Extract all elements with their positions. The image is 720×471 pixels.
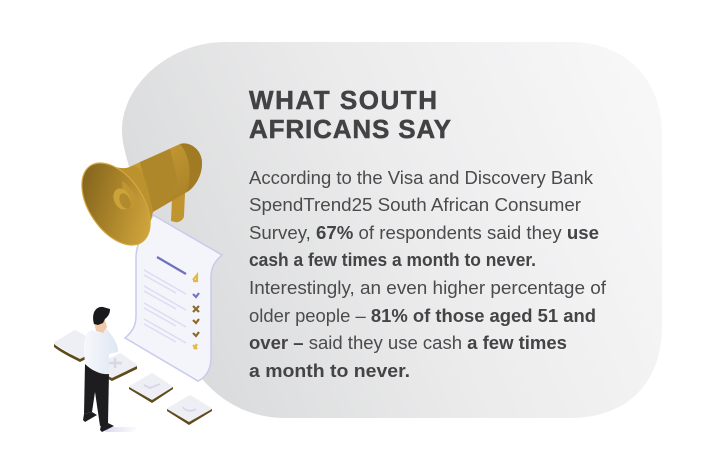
- icon: survey paper: [125, 215, 222, 381]
- icon: tile cross: [97, 354, 137, 381]
- icon: megaphone: [68, 143, 202, 257]
- body text: SpendTrend25 South African Consumer: [249, 194, 581, 215]
- body text: Interestingly, an even higher percentage of: [249, 277, 607, 298]
- body text: a month to never.: [249, 360, 410, 381]
- body text: over – said they use cash a few times: [249, 332, 567, 353]
- panel: speech background: [122, 42, 662, 418]
- body text: According to the Visa and Discovery Bank: [249, 167, 594, 188]
- icon: checklist marks: [193, 275, 199, 349]
- heading: [249, 85, 451, 144]
- heading: AFRICANS SAY: [249, 114, 451, 144]
- icon: tile smile: [167, 396, 212, 425]
- icon: tile check: [129, 374, 173, 403]
- heading: WHAT SOUTH: [249, 85, 437, 115]
- body text: cash a few times a month to never.: [249, 249, 536, 270]
- body text: Survey, 67% of respondents said they use: [249, 222, 599, 243]
- body text: older people – 81% of those aged 51 and: [249, 305, 596, 326]
- icon: tile sad face: [54, 331, 102, 362]
- body text: [249, 167, 607, 381]
- illustration: man standing: [83, 307, 140, 432]
